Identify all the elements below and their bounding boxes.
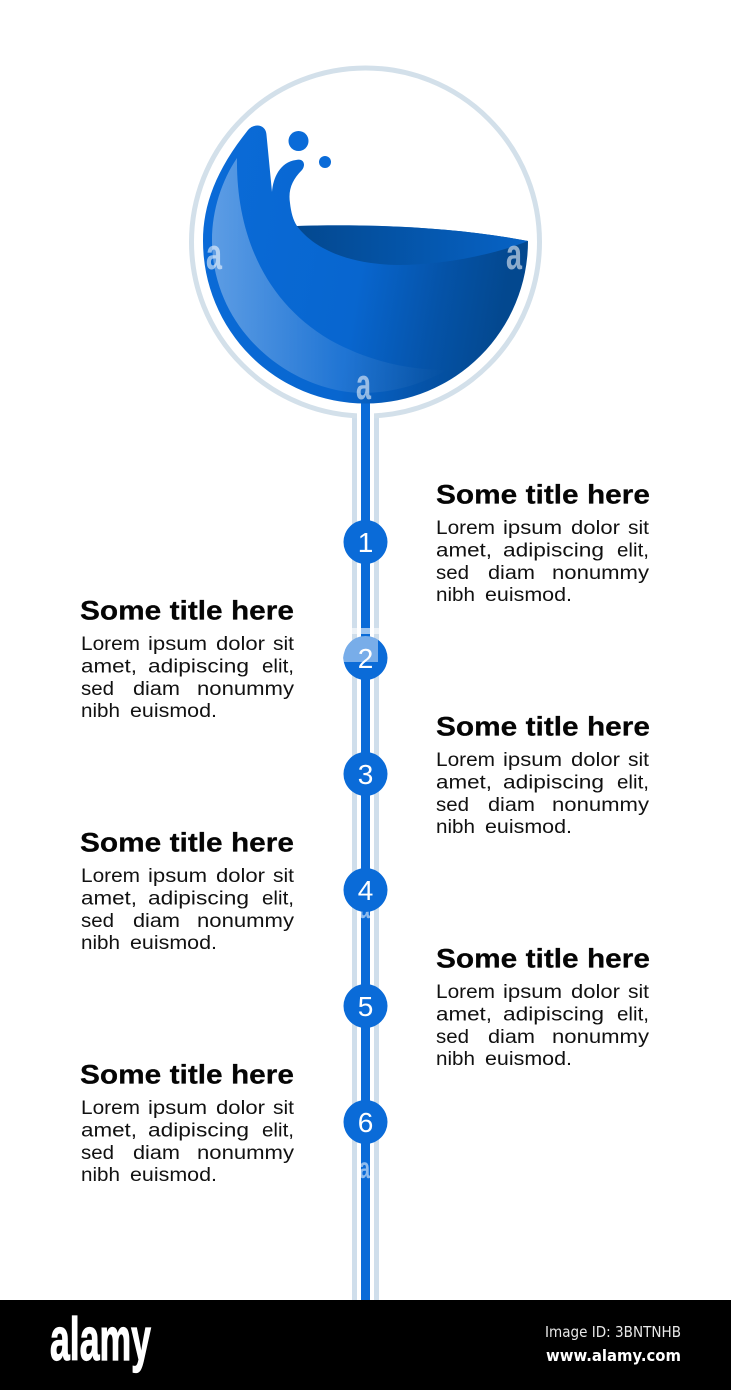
text block 1: nonummy — [552, 563, 650, 584]
text block 1: elit, — [617, 540, 649, 562]
text block 2: adipiscing — [148, 656, 249, 678]
text block 2: diam — [133, 679, 180, 700]
text block 2: nonummy — [197, 679, 295, 700]
text block 1 — [436, 480, 650, 606]
text block 5: elit, — [617, 1004, 649, 1026]
text block 1: dolor — [571, 518, 621, 539]
text block 3: adipiscing — [503, 772, 604, 794]
text block 4 — [80, 828, 295, 954]
alamy logo: alamy — [50, 1306, 151, 1373]
text block 1: sit — [628, 518, 650, 539]
text block 3: diam — [488, 795, 535, 816]
text block 4: Some title here — [80, 828, 294, 858]
watermark letters: a — [506, 230, 522, 279]
text block 6: ipsum — [148, 1098, 207, 1119]
text block 5: adipiscing — [503, 1004, 604, 1026]
stem outline — [352, 414, 379, 1300]
step marker 5 — [344, 984, 388, 1028]
text block 4: nonummy — [197, 911, 295, 932]
small droplet — [319, 156, 331, 168]
website: www.alamy.com — [546, 1346, 681, 1365]
text block 4: euismod. — [130, 933, 217, 954]
text block 1: Lorem — [436, 518, 495, 539]
text block 4: elit, — [262, 888, 294, 910]
step marker 6 — [344, 1100, 388, 1144]
step marker 4: 4 — [358, 875, 373, 906]
text block 6: nibh — [81, 1165, 120, 1186]
text block 1: adipiscing — [503, 540, 604, 562]
text block 2: euismod. — [130, 701, 217, 722]
glass ring — [192, 68, 540, 416]
text block 1: amet, — [436, 540, 492, 562]
text block 4: diam — [133, 911, 180, 932]
text block 3: ipsum — [503, 750, 562, 771]
text block 5: amet, — [436, 1004, 492, 1026]
text block 1: diam — [488, 563, 535, 584]
text block 1: Some title here — [436, 480, 650, 510]
text block 3: Lorem — [436, 750, 495, 771]
water body — [203, 126, 528, 404]
text block 4: nibh — [81, 933, 120, 954]
text block 4: adipiscing — [148, 888, 249, 910]
text block 4: ipsum — [148, 866, 207, 887]
water splash illustration — [203, 126, 528, 404]
text block 6: Lorem — [81, 1098, 140, 1119]
image id: Image ID: 3BNTNHB — [545, 1323, 681, 1341]
step marker 4 — [344, 868, 388, 912]
text block 2: elit, — [262, 656, 294, 678]
text block 3: amet, — [436, 772, 492, 794]
text block 3: nibh — [436, 817, 475, 838]
text block 5: Some title here — [436, 944, 650, 974]
text block 1: ipsum — [503, 518, 562, 539]
text block 5: nibh — [436, 1049, 475, 1070]
watermark letters — [206, 230, 522, 1185]
stem opening — [357, 410, 374, 422]
text block 6: adipiscing — [148, 1120, 249, 1142]
text block 3: sed — [436, 795, 469, 816]
text block 3: dolor — [571, 750, 621, 771]
text block 6: sit — [273, 1098, 295, 1119]
text block 2: ipsum — [148, 634, 207, 655]
text block 4: dolor — [216, 866, 266, 887]
text block 2: Some title here — [80, 596, 294, 626]
text block 6 — [80, 1060, 295, 1186]
text block 4: amet, — [81, 888, 137, 910]
glass highlight — [212, 158, 447, 393]
watermark letters: a — [206, 230, 222, 279]
footer bar — [0, 1300, 731, 1390]
step marker 5: 5 — [358, 991, 373, 1022]
text block 3: Some title here — [436, 712, 650, 742]
text block 2: nibh — [81, 701, 120, 722]
text block 3: euismod. — [485, 817, 572, 838]
text block 3: nonummy — [552, 795, 650, 816]
text block 5: diam — [488, 1027, 535, 1048]
text block 1: euismod. — [485, 585, 572, 606]
text block 5: nonummy — [552, 1027, 650, 1048]
step marker 2 — [344, 636, 388, 680]
text block 4: sed — [81, 911, 114, 932]
text block 3 — [436, 712, 650, 838]
watermark letters: a — [359, 892, 370, 925]
step marker 1: 1 — [358, 527, 373, 558]
text block 5: sit — [628, 982, 650, 1003]
text block 6: sed — [81, 1143, 114, 1164]
text block 6: elit, — [262, 1120, 294, 1142]
text block 5: euismod. — [485, 1049, 572, 1070]
text block 5: ipsum — [503, 982, 562, 1003]
text block 6: dolor — [216, 1098, 266, 1119]
step marker 6: 6 — [358, 1107, 373, 1138]
text block 4: Lorem — [81, 866, 140, 887]
text block 5: sed — [436, 1027, 469, 1048]
text block 6: amet, — [81, 1120, 137, 1142]
step marker 3: 3 — [358, 759, 373, 790]
watermark letters: a — [356, 360, 371, 409]
water surface — [297, 225, 528, 265]
text block 3: elit, — [617, 772, 649, 794]
text block 2: dolor — [216, 634, 266, 655]
text block 6: diam — [133, 1143, 180, 1164]
text block 3: sit — [628, 750, 650, 771]
stem centre line — [361, 400, 370, 1300]
text block 2: sed — [81, 679, 114, 700]
watermark band above marker 2 — [352, 628, 379, 634]
text block 2: Lorem — [81, 634, 140, 655]
text block 6: nonummy — [197, 1143, 295, 1164]
text block 2: amet, — [81, 656, 137, 678]
step marker 3 — [344, 752, 388, 796]
step marker 1 — [344, 520, 388, 564]
text block 6: euismod. — [130, 1165, 217, 1186]
text block 6: Some title here — [80, 1060, 294, 1090]
text block 1: sed — [436, 563, 469, 584]
text block 5: Lorem — [436, 982, 495, 1003]
text block 2 — [80, 596, 295, 722]
text block 2: sit — [273, 634, 295, 655]
text block 5: dolor — [571, 982, 621, 1003]
text block 4: sit — [273, 866, 295, 887]
step marker 2: 2 — [358, 643, 373, 674]
watermark letters: a — [359, 1152, 370, 1185]
text block 1: nibh — [436, 585, 475, 606]
large droplet — [288, 131, 308, 151]
text block 5 — [436, 944, 650, 1070]
